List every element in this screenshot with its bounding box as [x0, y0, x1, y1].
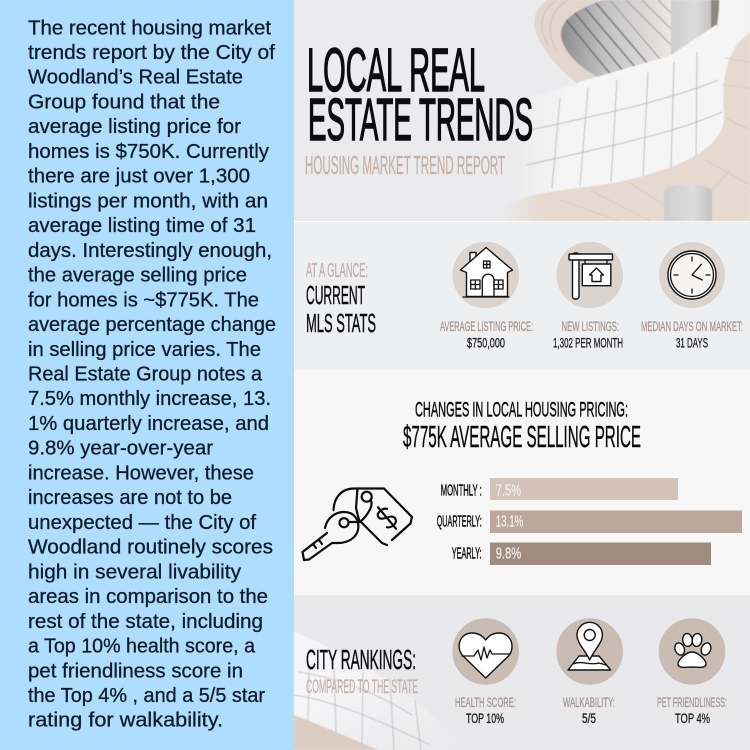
- left text panel: Group found that the: [28, 90, 220, 114]
- stat: median days on market: [641, 318, 743, 350]
- left text panel: Woodland routinely scores: [28, 536, 273, 559]
- city rankings heading: [306, 644, 418, 698]
- bar: quarterly: [437, 510, 742, 533]
- stat: average listing price: AVERAGE LISTING PRICE:: [440, 318, 533, 334]
- at a glance heading: AT A GLANCE:: [306, 260, 368, 282]
- left text panel: for homes is ~$775K. The: [28, 288, 259, 311]
- stat: average listing price: [440, 318, 533, 350]
- icon: heart: [452, 618, 519, 685]
- left text panel: the average selling price: [28, 264, 247, 287]
- left text panel: areas in comparison to the: [28, 585, 268, 608]
- left text panel: average listing price for: [28, 115, 241, 138]
- icon: keys and price tag: [302, 488, 412, 560]
- icon: clock: [659, 242, 725, 308]
- left text panel: listings per month, with an: [28, 189, 268, 212]
- left text panel: The recent housing market: [28, 16, 271, 39]
- left text panel: rest of the state, including: [28, 610, 263, 633]
- left text panel: high in several livability: [28, 560, 242, 583]
- icon: paw: [659, 618, 725, 685]
- left text panel: 9.8% year-over-year: [28, 437, 213, 460]
- left text panel: 7.5% monthly increase, 13.: [28, 387, 271, 410]
- bar: monthly: MONTHLY :: [441, 483, 482, 500]
- bar: yearly: [452, 542, 711, 565]
- left text panel: average percentage change: [28, 313, 276, 336]
- left text panel: pet friendliness score in: [28, 659, 243, 682]
- at a glance heading: [306, 260, 376, 338]
- bar: yearly: 9.8%: [496, 545, 521, 562]
- stat: median days on market: 31 DAYS: [676, 334, 708, 350]
- photo: curved building: [500, 0, 750, 221]
- left text panel: rating for walkability.: [28, 709, 223, 732]
- left text panel: unexpected — the City of: [28, 511, 256, 534]
- ranking: walkability: [563, 694, 615, 726]
- panel: header with architecture photo: [294, 0, 750, 221]
- panel: at a glance: MLS STATS: [306, 308, 376, 338]
- left text panel: 1% quarterly increase, and: [28, 412, 269, 435]
- ranking: health score: TOP 10%: [466, 710, 504, 726]
- ranking: pet friendliness: [657, 694, 727, 726]
- panel: header with architecture photo: HOUSING MARKET TREND REPORT: [305, 150, 505, 180]
- bar: quarterly: 13.1%: [496, 514, 523, 531]
- bar: monthly: [441, 478, 678, 500]
- left text panel: there are just over 1,300: [28, 165, 250, 188]
- ranking: pet friendliness: TOP 4%: [675, 710, 710, 726]
- left text panel: trends report by the City of: [28, 41, 275, 64]
- icon: house: [452, 242, 519, 308]
- title: LOCAL REAL: [307, 36, 485, 104]
- bar: monthly: 7.5%: [496, 483, 521, 500]
- left text panel: increase. However, these: [28, 461, 254, 484]
- ranking: health score: [455, 694, 516, 726]
- bar: yearly: YEARLY:: [452, 545, 482, 562]
- left text panel: Real Estate Group notes a: [28, 362, 263, 386]
- stat: average listing price: $750,000: [467, 334, 505, 350]
- at a glance heading: CURRENT: [306, 280, 365, 310]
- panel: city rankings: COMPARED TO THE STATE: [306, 677, 418, 698]
- ranking: walkability: 5/5: [582, 710, 596, 726]
- stat: new listings: NEW LISTINGS:: [562, 318, 619, 334]
- photo: lower building corner: [294, 632, 462, 750]
- title: [307, 36, 533, 153]
- left text panel: in selling price varies. The: [28, 338, 261, 361]
- icon: for sale sign: [556, 242, 623, 308]
- city rankings heading: CITY RANKINGS:: [306, 644, 416, 675]
- left text panel: the Top 4% , and a 5/5 star: [28, 684, 265, 707]
- left text panel: increases are not to be: [28, 486, 232, 509]
- icon: map pin: [556, 618, 623, 685]
- left text panel: a Top 10% health score, a: [28, 634, 256, 658]
- bar chart: [437, 478, 742, 565]
- stat: new listings: [553, 318, 623, 350]
- left text panel: days. Interestingly enough,: [28, 239, 272, 262]
- panel: at a glance: [294, 222, 750, 375]
- ranking: walkability: WALKABILITY:: [563, 694, 615, 710]
- left text panel: Woodland’s Real Estate: [28, 66, 243, 89]
- left text panel: [0, 0, 294, 750]
- ranking: health score: HEALTH SCORE:: [455, 694, 516, 710]
- panel: city rankings: [294, 595, 750, 750]
- left text panel: average listing time of 31: [28, 214, 256, 237]
- left text panel: homes is $750K. Currently: [28, 140, 270, 163]
- stat: new listings: 1,302 PER MONTH: [553, 334, 623, 350]
- pricing heading: [403, 399, 641, 454]
- bar: quarterly: QUARTERLY:: [437, 514, 482, 531]
- panel: pricing changes: [294, 375, 750, 595]
